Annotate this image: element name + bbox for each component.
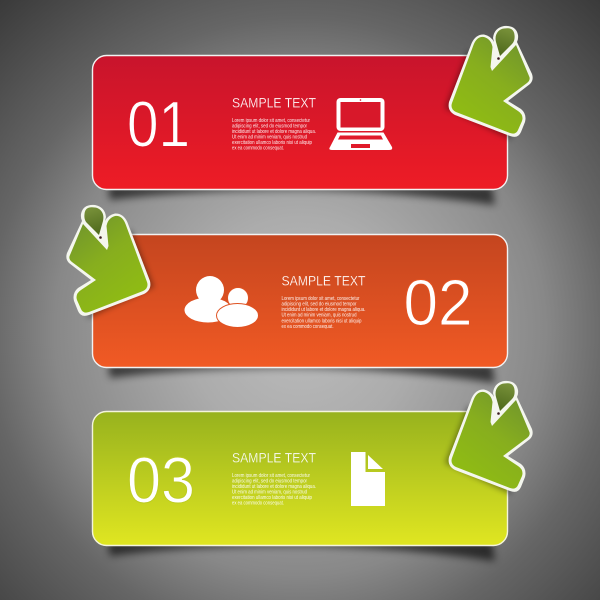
text block: Ut enim ad minim veniam, quis nostrud	[282, 313, 357, 319]
text block: ex ea commodo consequat.	[232, 146, 284, 152]
text block: adipiscing elit, sed do eiusmod tempor	[282, 302, 357, 308]
text block: Lorem ipsum dolor sit amet, consectetur	[232, 118, 310, 124]
text block: exercitation ullamco laboris nisi ut aliquip	[232, 140, 312, 146]
text block: Ut enim ad minim veniam, quis nostrud	[232, 490, 307, 496]
text block	[232, 118, 316, 152]
text block: exercitation ullamco laboris nisi ut aliquip	[282, 318, 362, 324]
panel: 02 orange	[92, 234, 508, 383]
text block: adipiscing elit, sed do eiusmod tempor	[232, 478, 307, 484]
text block: Lorem ipsum dolor sit amet, consectetur	[282, 296, 360, 302]
arrow: top right	[445, 26, 533, 140]
text block: Lorem ipsum dolor sit amet, consectetur	[232, 473, 310, 479]
heading: SAMPLE TEXT	[232, 450, 316, 466]
text block	[232, 473, 316, 506]
arrow: bottom right	[445, 381, 533, 495]
text block: Ut enim ad minim veniam, quis nostrud	[232, 134, 307, 140]
text block: adipiscing elit, sed do eiusmod tempor	[232, 124, 307, 130]
text block: ex ea commodo consequat.	[282, 324, 334, 330]
text block: ex ea commodo consequat.	[232, 500, 284, 506]
panel: 01 red	[92, 56, 508, 205]
text block: exercitation ullamco laboris nisi ut aliquip	[232, 495, 312, 501]
number 01: 01	[127, 88, 190, 160]
number 02: 02	[404, 266, 472, 339]
heading: SAMPLE TEXT	[232, 94, 316, 110]
arrow: middle left	[66, 205, 154, 319]
number 03: 03	[127, 444, 195, 516]
panel: 03 green	[92, 412, 508, 561]
icon: document	[351, 452, 385, 506]
icon: people	[184, 276, 258, 328]
text block: incididunt ut labore et dolore magna aliqua.	[282, 307, 366, 313]
icon: laptop	[329, 98, 392, 150]
text block	[282, 296, 366, 330]
text block: incididunt ut labore et dolore magna aliqua.	[232, 129, 316, 135]
text block: incididunt ut labore et dolore magna aliqua.	[232, 484, 316, 490]
heading: SAMPLE TEXT	[282, 272, 366, 288]
